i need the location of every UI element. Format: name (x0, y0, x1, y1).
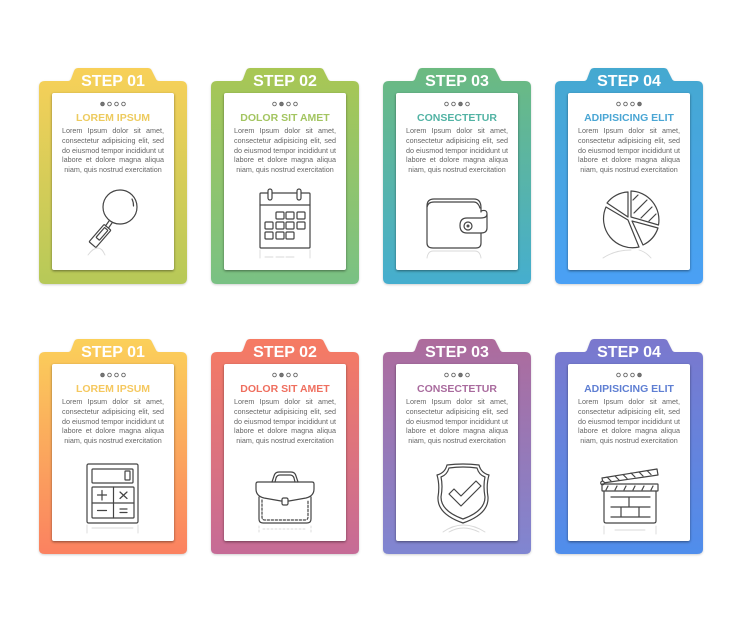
icon reflection (427, 251, 481, 258)
progress dots (101, 102, 125, 106)
icon: magnifying glass (89, 190, 137, 248)
inner panel (396, 364, 518, 541)
body text: niam, quis nostrud exercitation (236, 436, 334, 445)
inner panel (52, 364, 174, 541)
body text: labore et dolore magna aliqua (234, 426, 336, 435)
body text: do eiusmod tempor incididunt ut (578, 146, 680, 155)
body text: Lorem Ipsum dolor sit amet, (406, 126, 508, 135)
inner panel (224, 93, 346, 270)
icon: briefcase (256, 472, 314, 523)
icon reflection (88, 248, 105, 255)
inner panel (224, 364, 346, 541)
body text: Lorem Ipsum dolor sit amet, (62, 397, 164, 406)
card: bottom row step 01 (38, 339, 188, 556)
progress dots (445, 102, 469, 106)
card: bottom row step 02 (210, 339, 360, 556)
inner panel (52, 93, 174, 270)
body text: do eiusmod tempor incididunt ut (62, 417, 164, 426)
card frame with tab (39, 68, 187, 284)
card frame with tab (555, 68, 703, 284)
progress dots (617, 102, 641, 106)
heading: LOREM IPSUM (76, 112, 150, 124)
icon: wallet (427, 199, 487, 248)
heading: ADIPISICING ELIT (584, 383, 674, 395)
card: top row step 03 (382, 68, 532, 286)
body text: Lorem Ipsum dolor sit amet, (406, 397, 508, 406)
body text: niam, quis nostrud exercitation (64, 165, 162, 174)
body text: labore et dolore magna aliqua (578, 155, 680, 164)
progress dots (273, 102, 297, 106)
heading: LOREM IPSUM (76, 383, 150, 395)
icon reflection (604, 526, 656, 534)
body text (62, 397, 164, 445)
body text: do eiusmod tempor incididunt ut (62, 146, 164, 155)
body text: niam, quis nostrud exercitation (580, 165, 678, 174)
card: top row step 01 (38, 68, 188, 286)
body text: labore et dolore magna aliqua (406, 155, 508, 164)
body text: consectetur adipisicing elit, sed (406, 407, 508, 416)
step label: STEP 04 (597, 73, 661, 90)
body text: consectetur adipisicing elit, sed (62, 407, 164, 416)
body text: Lorem Ipsum dolor sit amet, (234, 397, 336, 406)
body text: niam, quis nostrud exercitation (64, 436, 162, 445)
body text: consectetur adipisicing elit, sed (406, 136, 508, 145)
body text: consectetur adipisicing elit, sed (234, 407, 336, 416)
icon reflection (87, 525, 138, 533)
step label: STEP 01 (81, 344, 145, 361)
body text: Lorem Ipsum dolor sit amet, (234, 126, 336, 135)
progress dots (101, 373, 125, 377)
progress dots (273, 373, 297, 377)
inner panel (396, 93, 518, 270)
body text (406, 126, 508, 174)
body text: Lorem Ipsum dolor sit amet, (578, 397, 680, 406)
body text: Lorem Ipsum dolor sit amet, (578, 126, 680, 135)
icon reflection (260, 250, 310, 258)
step label: STEP 01 (81, 73, 145, 90)
icon reflection (603, 250, 651, 258)
heading: DOLOR SIT AMET (240, 112, 330, 124)
body text (62, 126, 164, 174)
body text: labore et dolore magna aliqua (406, 426, 508, 435)
card frame with tab (39, 339, 187, 554)
body text: labore et dolore magna aliqua (234, 155, 336, 164)
body text: consectetur adipisicing elit, sed (578, 407, 680, 416)
body text: niam, quis nostrud exercitation (408, 436, 506, 445)
card: bottom row step 04 (554, 339, 704, 556)
heading: ADIPISICING ELIT (584, 112, 674, 124)
body text (578, 397, 680, 445)
card frame with tab (211, 339, 359, 554)
body text: niam, quis nostrud exercitation (408, 165, 506, 174)
body text: labore et dolore magna aliqua (578, 426, 680, 435)
step label: STEP 03 (425, 344, 489, 361)
icon: shield with check mark (437, 464, 489, 523)
card frame with tab (383, 68, 531, 284)
icon reflection (259, 526, 311, 532)
heading: CONSECTETUR (417, 112, 497, 124)
progress dots (445, 373, 469, 377)
icon: clapperboard (601, 469, 658, 523)
heading: CONSECTETUR (417, 383, 497, 395)
body text: niam, quis nostrud exercitation (580, 436, 678, 445)
step label: STEP 02 (253, 344, 317, 361)
icon: calculator (87, 464, 138, 523)
step label: STEP 02 (253, 73, 317, 90)
icon: calendar (260, 189, 310, 248)
body text (578, 126, 680, 174)
body text (234, 397, 336, 445)
body text: labore et dolore magna aliqua (62, 155, 164, 164)
body text: do eiusmod tempor incididunt ut (578, 417, 680, 426)
body text: do eiusmod tempor incididunt ut (234, 417, 336, 426)
card: top row step 04 (554, 68, 704, 286)
card frame with tab (555, 339, 703, 554)
body text: consectetur adipisicing elit, sed (578, 136, 680, 145)
progress dots (617, 373, 641, 377)
body text (234, 126, 336, 174)
card: top row step 02 (210, 68, 360, 286)
step label: STEP 04 (597, 344, 661, 361)
card frame with tab (211, 68, 359, 284)
inner panel (568, 93, 690, 270)
card frame with tab (383, 339, 531, 554)
heading: DOLOR SIT AMET (240, 383, 330, 395)
body text: niam, quis nostrud exercitation (236, 165, 334, 174)
body text: do eiusmod tempor incididunt ut (234, 146, 336, 155)
body text: do eiusmod tempor incididunt ut (406, 146, 508, 155)
body text: consectetur adipisicing elit, sed (62, 136, 164, 145)
inner panel (568, 364, 690, 541)
body text: labore et dolore magna aliqua (62, 426, 164, 435)
icon: pie chart (604, 191, 659, 248)
step label: STEP 03 (425, 73, 489, 90)
icon reflection (443, 525, 485, 532)
body text: Lorem Ipsum dolor sit amet, (62, 126, 164, 135)
body text (406, 397, 508, 445)
card: bottom row step 03 (382, 339, 532, 556)
body text: consectetur adipisicing elit, sed (234, 136, 336, 145)
body text: do eiusmod tempor incididunt ut (406, 417, 508, 426)
